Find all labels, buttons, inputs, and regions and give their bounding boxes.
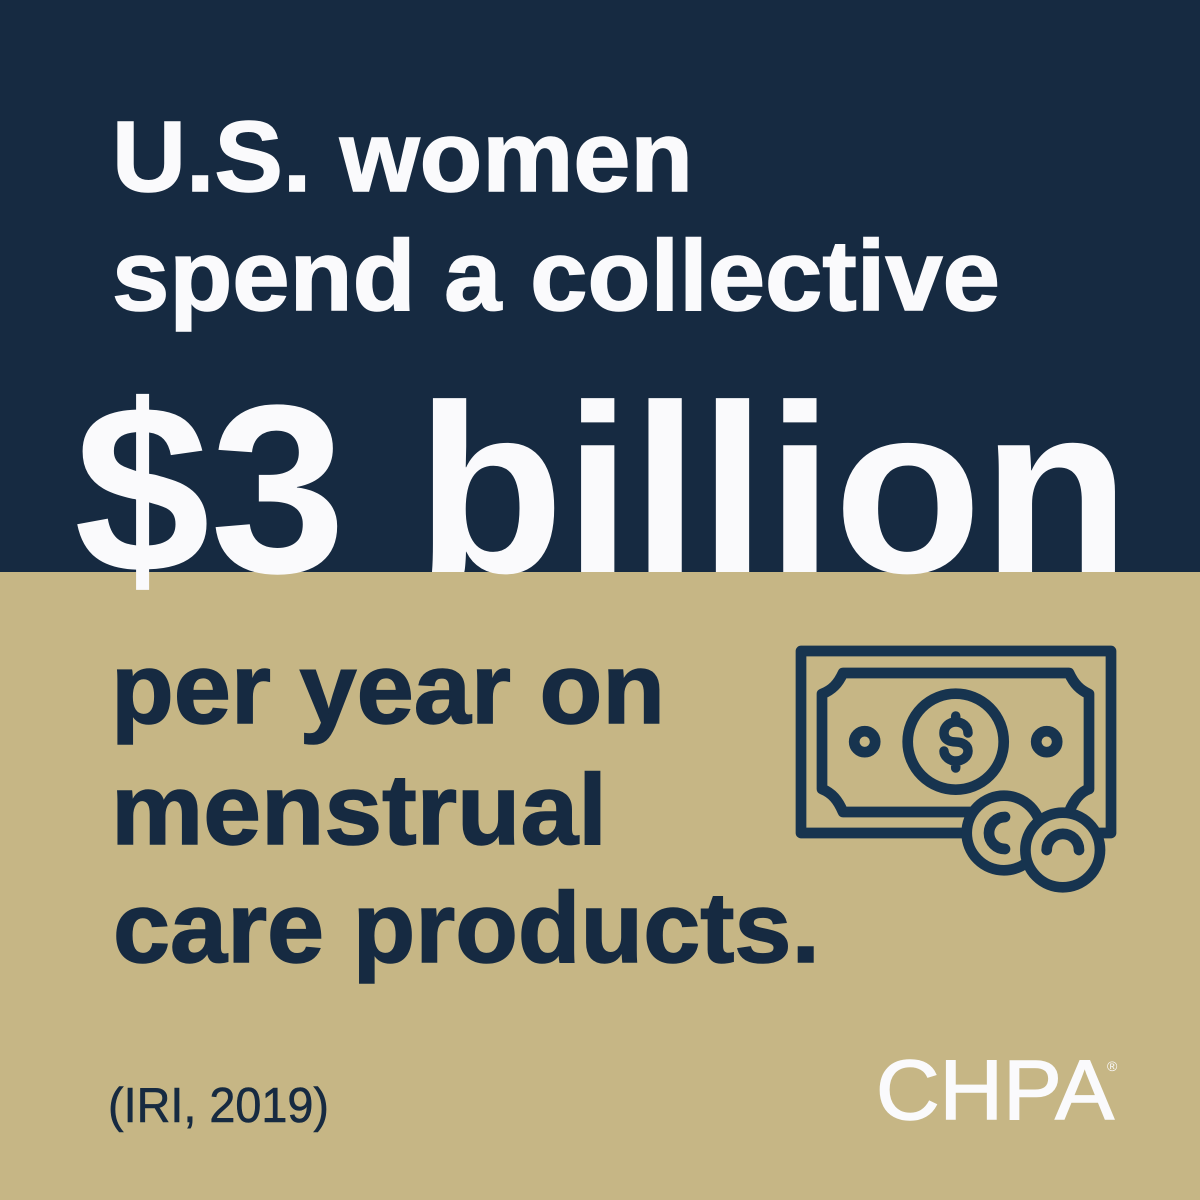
panel: navy top background: [0, 0, 1200, 572]
headline figure: $3 billion: $3: [74, 355, 346, 623]
heading: U.S. women spend a collective: U.S. women: [112, 101, 693, 213]
heading: U.S. women spend a collective: [112, 101, 1000, 332]
icon: front coin mark: [1047, 834, 1079, 850]
icon: banknote outer frame: [801, 651, 1111, 833]
icon: dollar sign in medallion: [944, 716, 968, 768]
icon: centre medallion: [908, 694, 1004, 790]
icon: banknote inner border: [822, 673, 1089, 812]
headline figure: $3 billion: [74, 355, 1130, 623]
icon: left eyelet: [854, 731, 875, 752]
icon: rear coin mark: [989, 817, 1005, 849]
icon: banknote with coins: [801, 651, 1111, 887]
icon: rear coin: [967, 796, 1041, 870]
logo: CHPA: CHPA: [876, 1043, 1114, 1137]
text block: per year on menstrual care products: care products.: [113, 872, 820, 984]
headline figure: $3 billion: billion: [416, 355, 1130, 623]
source citation: (IRI, 2019): [108, 1079, 329, 1133]
text block: per year on menstrual care products: [111, 633, 820, 984]
text block: per year on menstrual care products: per year on: [111, 633, 665, 745]
text block: per year on menstrual care products: menstrual: [111, 754, 607, 866]
logo: registered mark: ®: [1107, 1058, 1118, 1074]
icon: right eyelet: [1036, 731, 1057, 752]
icon: front coin: [1025, 813, 1100, 887]
heading: U.S. women spend a collective: spend a collective: [112, 220, 1000, 332]
panel: gold bottom background: [0, 572, 1200, 1200]
